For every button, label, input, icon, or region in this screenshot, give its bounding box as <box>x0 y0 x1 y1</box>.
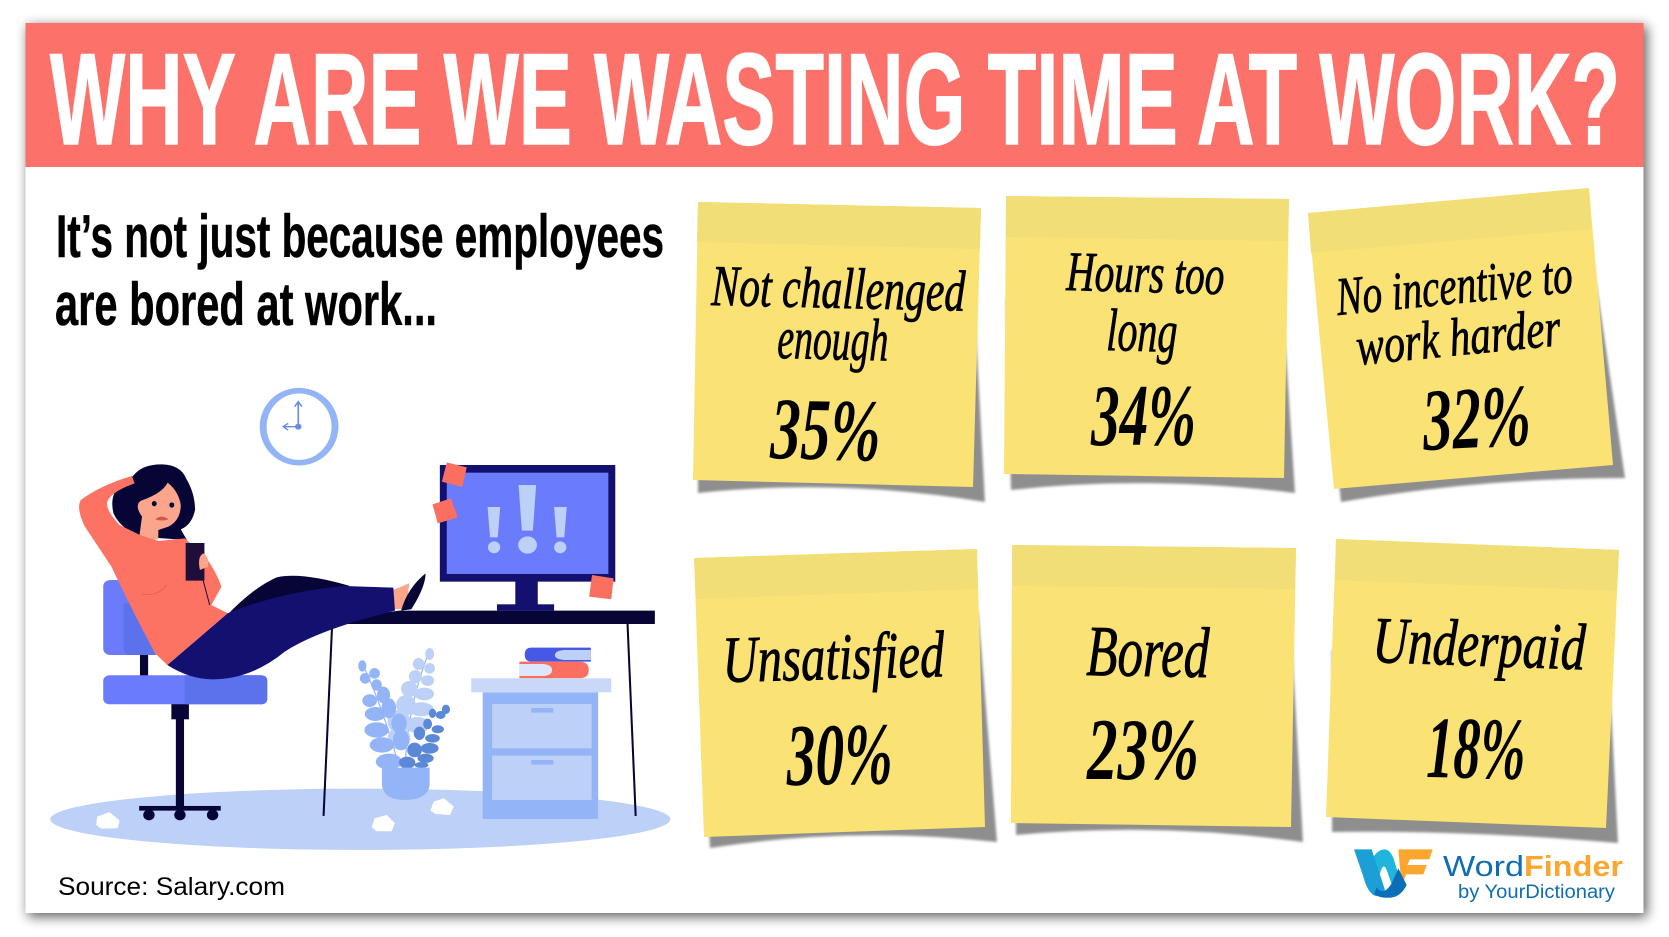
logo: WordFinder by YourDictionary <box>1354 849 1623 903</box>
sticky note: not challenged enough 35%: Not challenged <box>710 253 967 324</box>
logo: WordFinder by YourDictionary: by YourDictionary <box>1458 882 1616 903</box>
sticky note: unsatisfied 30%: Unsatisfied <box>721 618 946 697</box>
sticky note: hours too long 34%: long <box>1106 297 1178 365</box>
stack of books <box>519 648 591 678</box>
dark far leg <box>226 576 350 617</box>
sticky note: no incentive to work harder 32%: 32% <box>1419 367 1533 470</box>
sticky note: underpaid 18%: 18% <box>1426 700 1526 799</box>
office chair <box>103 580 267 820</box>
logo: WordFinder by YourDictionary: Finder <box>1524 851 1623 883</box>
floor ellipse <box>50 789 670 850</box>
illustration: bored woman at desk <box>50 391 670 850</box>
sticky note: not challenged enough 35%: 35% <box>769 381 882 480</box>
filing cabinet <box>471 678 611 819</box>
sticky note: bored 23% <box>1011 545 1303 842</box>
desk <box>324 611 655 816</box>
sticky note: bored 23%: 23% <box>1086 702 1199 799</box>
sticky note: unsatisfied 30%: 30% <box>785 706 893 805</box>
icon: WF mark <box>1354 849 1433 898</box>
sticky note: underpaid 18% <box>1326 539 1619 843</box>
subtitle text <box>55 203 664 338</box>
icon: wall clock <box>263 391 335 463</box>
sticky note: bored 23%: Bored <box>1086 611 1211 693</box>
shoe <box>401 573 426 611</box>
subtitle text: are bored at work... <box>55 271 437 338</box>
pants <box>167 586 395 679</box>
sticky note: no incentive to work harder 32%: work harder <box>1353 297 1564 377</box>
sticky note: not challenged enough 35%: enough <box>777 305 889 374</box>
crumpled paper balls <box>96 798 454 831</box>
face <box>138 483 181 541</box>
sticky note: hours too long 34% <box>1004 196 1295 493</box>
sticky note: no incentive to work harder 32%: No incentive to <box>1333 244 1575 327</box>
skin foot <box>393 583 409 609</box>
sticky note: no incentive to work harder 32% <box>1308 188 1625 502</box>
sticky note: hours too long 34%: 34% <box>1090 368 1196 465</box>
potted plant <box>358 648 450 800</box>
woman reclining <box>79 464 426 679</box>
sticky note: hours too long 34%: Hours too <box>1065 241 1225 307</box>
computer monitor with exclamation marks <box>432 462 615 611</box>
phone <box>186 543 204 581</box>
source note: Source: Salary.com <box>58 873 285 901</box>
sweater <box>79 476 228 665</box>
sticky note: unsatisfied 30% <box>694 549 997 848</box>
wordmark: Word <box>1443 851 1524 883</box>
subtitle text: It’s not just because employees <box>56 203 664 270</box>
sticky note: underpaid 18%: Underpaid <box>1371 604 1588 684</box>
hair <box>112 464 195 540</box>
sticky note: not challenged enough 35% <box>693 202 985 502</box>
